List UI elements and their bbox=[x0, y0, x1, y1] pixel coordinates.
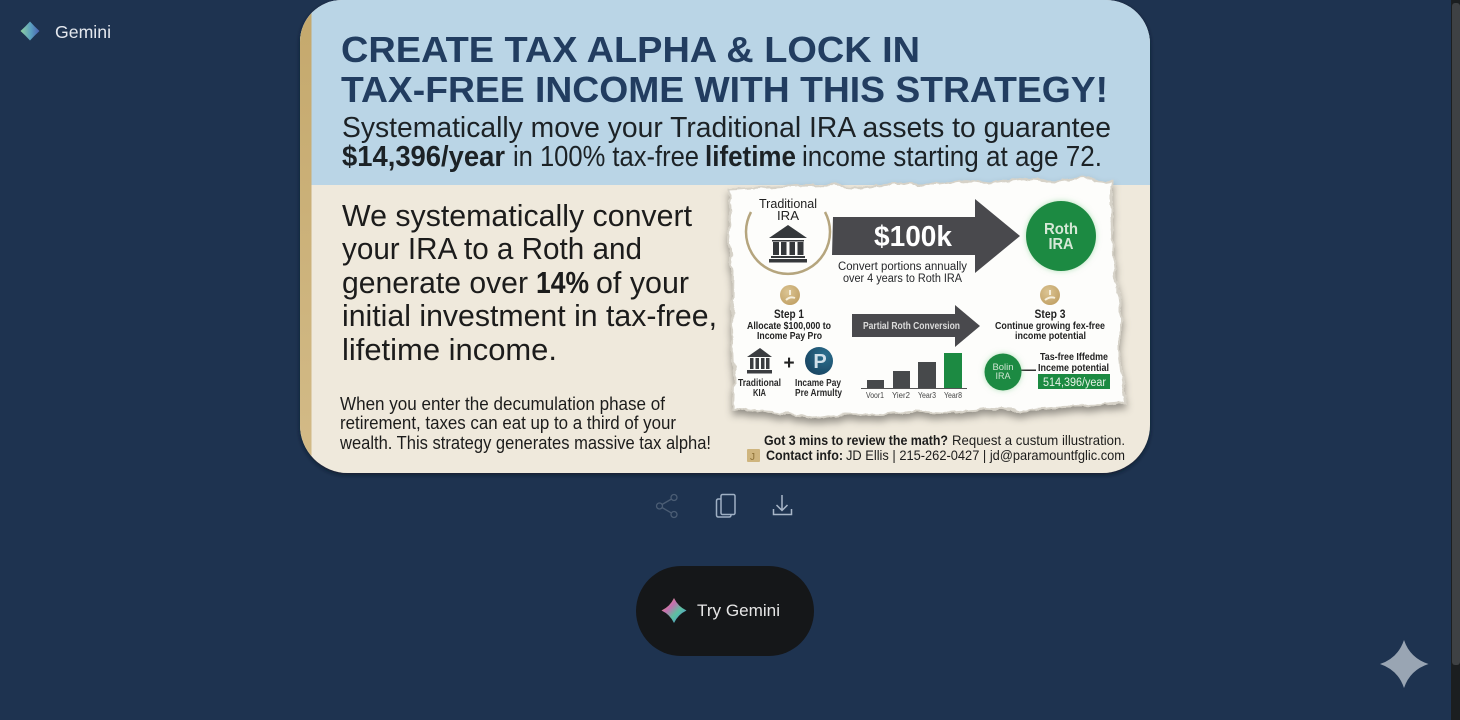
bar chart: Voor1 bbox=[866, 391, 884, 400]
icon: copy bbox=[716, 494, 735, 517]
Bolin IRA callout: Tas-free Iffedme bbox=[1040, 352, 1108, 363]
icon: step 3 coin bbox=[1040, 285, 1060, 305]
main paragraph bbox=[342, 198, 717, 367]
Roth IRA circle: Roth bbox=[1044, 221, 1078, 238]
step 3 bbox=[995, 285, 1105, 342]
product labels bbox=[738, 378, 842, 399]
product labels: KIA bbox=[753, 388, 766, 399]
Try Gemini button bbox=[636, 566, 814, 656]
call to action: Request a custum illustration. bbox=[952, 432, 1125, 448]
subheading: in 100% tax-free bbox=[513, 141, 699, 173]
conversion caption: over 4 years to Roth IRA bbox=[843, 273, 962, 285]
icon: download bbox=[774, 495, 792, 514]
income badge bbox=[1038, 374, 1110, 389]
Bolin IRA callout bbox=[984, 352, 1110, 390]
call to action: Got 3 mins to review the math? bbox=[764, 432, 948, 448]
step 3 text: income potential bbox=[1015, 331, 1086, 342]
main paragraph: your IRA to a Roth and bbox=[342, 231, 642, 266]
scrollbar bbox=[1451, 0, 1460, 720]
torn paper sheet bbox=[728, 178, 1126, 419]
product labels: Incame Pay bbox=[795, 378, 841, 389]
main paragraph: initial investment in tax-free, bbox=[342, 298, 717, 333]
main paragraph: of your bbox=[596, 265, 689, 300]
product labels: Traditional bbox=[738, 378, 781, 389]
bar chart: Yier2 bbox=[892, 391, 911, 400]
icon: Gemini star bbox=[662, 598, 686, 623]
main paragraph: We systematically convert bbox=[342, 198, 692, 233]
subheading: lifetime bbox=[705, 141, 796, 173]
icon: contact badge bbox=[747, 449, 760, 463]
title: CREATE TAX ALPHA & LOCK IN bbox=[341, 29, 920, 70]
title bbox=[341, 29, 1108, 110]
subheading bbox=[342, 112, 1111, 173]
icon: share bbox=[656, 494, 677, 518]
Traditional IRA group bbox=[746, 197, 830, 274]
arrow: $100k conversion bbox=[832, 199, 1020, 273]
panel: torn paper diagram bbox=[728, 178, 1126, 419]
arrow: partial Roth conversion bbox=[852, 305, 980, 347]
step 1 text: Income Pay Pro bbox=[757, 331, 822, 342]
supporting paragraph: When you enter the decumulation phase of bbox=[340, 394, 666, 414]
title: TAX-FREE INCOME WITH THIS STRATEGY! bbox=[341, 69, 1108, 110]
Bolin IRA callout: Inceme potential bbox=[1038, 363, 1109, 374]
step 3 text bbox=[995, 309, 1105, 342]
bar chart: Year8 bbox=[944, 391, 962, 400]
subheading: income starting at age 72. bbox=[802, 141, 1102, 173]
step 3 text: Step 3 bbox=[1034, 309, 1066, 321]
plus sign: + bbox=[783, 353, 795, 374]
call to action: JD Ellis | 215-262-0427 | jd@paramountfglic.com bbox=[846, 447, 1125, 463]
icon: contact badge: J bbox=[750, 452, 755, 463]
call to action: Contact info: bbox=[766, 447, 843, 463]
step 1 text: Step 1 bbox=[774, 309, 805, 321]
icon: sparkle watermark bbox=[1380, 640, 1428, 688]
Roth IRA circle: IRA bbox=[1048, 236, 1074, 253]
conversion caption: Convert portions annually bbox=[838, 261, 967, 273]
main paragraph: generate over bbox=[342, 265, 528, 300]
product labels: Pre Armulty bbox=[795, 388, 842, 399]
Traditional IRA label: Traditional bbox=[759, 197, 817, 211]
step 3 text: Continue growing fex-free bbox=[995, 321, 1105, 332]
supporting paragraph bbox=[339, 394, 711, 453]
icon: small bank bbox=[747, 348, 772, 374]
conversion caption bbox=[838, 261, 967, 285]
step 1 text: Allocate $100,000 to bbox=[747, 321, 831, 332]
step 1 bbox=[747, 285, 831, 342]
card base bbox=[300, 0, 1150, 473]
Traditional IRA label bbox=[759, 197, 817, 223]
main paragraph: lifetime income. bbox=[342, 332, 557, 367]
icon: step 1 coin bbox=[780, 285, 800, 305]
supporting paragraph: retirement, taxes can eat up to a third of your bbox=[340, 413, 676, 433]
panel: infographic card bbox=[300, 0, 1150, 473]
Bolin IRA callout: IRA bbox=[996, 371, 1011, 382]
gold side strip bbox=[300, 0, 312, 473]
icon: Gemini diamond bbox=[20, 22, 40, 40]
Bolin IRA callout: 514,396/year bbox=[1043, 377, 1106, 389]
bar chart: Year3 bbox=[918, 391, 936, 400]
Traditional IRA label: IRA bbox=[777, 209, 800, 223]
icon: bank bbox=[769, 225, 807, 262]
main paragraph: 14% bbox=[536, 265, 589, 300]
icon: Income Pay logo bbox=[805, 347, 833, 375]
panel: blue header band bbox=[300, 0, 1150, 185]
button label: Try Gemini bbox=[697, 602, 780, 620]
step 1 text bbox=[747, 309, 831, 342]
call to action bbox=[747, 432, 1125, 463]
arrow value: $100k bbox=[874, 221, 953, 253]
supporting paragraph: wealth. This strategy generates massive tax alpha! bbox=[339, 433, 711, 453]
Bolin IRA callout: Bolin bbox=[992, 362, 1014, 373]
arrow: partial Roth conversion: Partial Roth Conversion bbox=[863, 321, 960, 332]
logo wordmark: Gemini bbox=[55, 22, 111, 42]
bar chart bbox=[861, 353, 967, 400]
Roth IRA circle bbox=[1026, 201, 1096, 271]
subheading: $14,396/year bbox=[342, 141, 505, 173]
Gemini logo bbox=[20, 22, 111, 42]
icon: Income Pay logo: P bbox=[813, 351, 827, 373]
gold ring bbox=[746, 212, 830, 274]
subheading: Systematically move your Traditional IRA assets to guarantee bbox=[342, 112, 1111, 144]
